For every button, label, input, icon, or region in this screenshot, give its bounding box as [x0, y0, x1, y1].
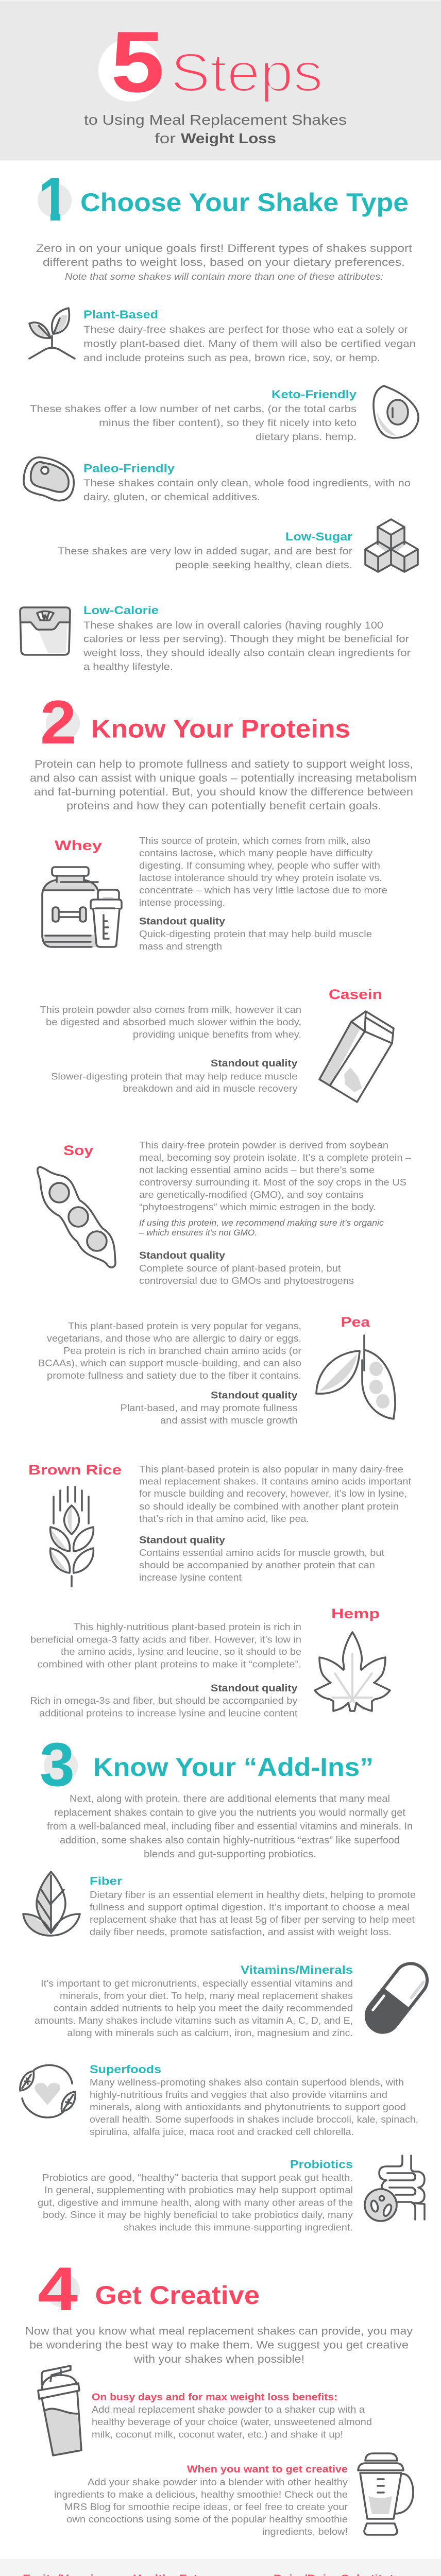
step 3 intro: [47, 1793, 413, 1860]
icon: hemp leaf: [315, 1632, 390, 1711]
icon: sprout: [29, 308, 75, 359]
text: brown rice: increase lysine content: [139, 1572, 242, 1583]
text: brown rice: [139, 1464, 411, 1583]
text: pea: Plant-based, and may promote fullness: [121, 1403, 298, 1413]
subtitle: [84, 112, 347, 146]
icon: protein tub and shaker: [42, 867, 122, 947]
step 3 intro: addition, some shakes also contain highly-nutritious “extras” like superfood: [60, 1835, 400, 1846]
heading: hemp: Hemp: [331, 1606, 380, 1621]
text: soy: Complete source of plant-based protein, but: [139, 1263, 341, 1274]
text: superfoods: [90, 2063, 418, 2137]
step 3 intro: replacement shakes contain to give you the nutrients you would normally get: [54, 1807, 406, 1819]
text: whey: Quick-digesting protein that may help build muscle: [139, 929, 372, 939]
icon: steak: [24, 457, 74, 501]
text: keto-friendly: dietary plans. hemp.: [256, 431, 357, 443]
step 3 heading: 3: [40, 1731, 75, 1799]
icon: soy pod: [38, 1167, 115, 1267]
text: plant-based: mostly plant-based diet. Many of them will also be certified vegan: [83, 338, 416, 349]
step 4 heading: 4: [38, 2255, 78, 2324]
text: get creative: When you want to get creative: [187, 2464, 348, 2475]
text: paleo-friendly: Paleo-Friendly: [83, 462, 175, 475]
text: fiber: Dietary fiber is an essential element in healthy diets, helping to promote: [90, 1890, 416, 1900]
panel: plant-based: [29, 308, 416, 364]
text: pea: and assist with muscle growth: [160, 1415, 298, 1426]
text: plant-based: Plant-Based: [83, 308, 158, 321]
text: probiotics: gut, digestive and immune health, along with many other areas of the: [38, 2198, 353, 2208]
text: casein: Standout quality: [211, 1058, 298, 1069]
text: casein: Slower-digesting protein that may help reduce muscle: [51, 1072, 298, 1082]
text: brown rice: Contains essential amino acids for muscle growth, but: [139, 1548, 384, 1558]
step 2 heading: [40, 688, 350, 757]
text: superfoods: spirulina, alfalfa juice, maca root and cracked cell chlorella.: [90, 2127, 354, 2137]
icon: shaker cup: [38, 2366, 81, 2455]
step 1 intro: different paths to weight loss, based on your dietary preferences.: [43, 257, 405, 268]
text: fiber: replacement shake that has at least 5g of fiber per serving to help meet: [90, 1914, 415, 1925]
icon: capsule: [360, 1957, 434, 2039]
text: casein: This protein powder also comes from milk, however it can: [40, 1005, 301, 1015]
text: keto-friendly: [30, 388, 357, 443]
text: low-calorie: a healthy lifestyle.: [83, 662, 173, 673]
icon: pea pod: [316, 1335, 395, 1419]
step 4 intro: be wondering the best way to make them. We suggest you get creative: [29, 2339, 409, 2351]
step 4 intro: [25, 2326, 413, 2365]
panel: keto-friendly: [30, 386, 418, 443]
text: get creative: MRS Blog for smoothie recipe ideas, or feel free to create your: [64, 2502, 348, 2512]
heading: brown rice: Brown Rice: [28, 1462, 122, 1478]
text: plant-based: and include proteins such as pea, brown rice, soy, or hemp.: [83, 352, 380, 364]
text: brown rice: Standout quality: [139, 1535, 225, 1546]
step 4 intro: with your shakes when possible!: [133, 2353, 304, 2365]
panel: vitamins and minerals: [35, 1957, 434, 2039]
text: whey: contains lactose, which many people have difficulty: [139, 848, 372, 858]
text: superfoods: overall health. Some superfoods in shakes include broccoli, kale, spinach,: [90, 2114, 418, 2125]
text: pea: This plant-based protein is very popular for vegans,: [68, 1321, 301, 1331]
step 1 intro: [36, 243, 412, 282]
text: brown rice: so should ideally be combined with another plant protein: [139, 1501, 399, 1512]
icon: intestine with bacteria: [365, 2156, 425, 2221]
text: casein: providing unique benefits from whey.: [133, 1029, 301, 1040]
text: plant-based: [83, 308, 416, 364]
text: soy: are genetically-modified (GMO), and soy contains: [139, 1190, 364, 1200]
text: whey: This source of protein, which comes from milk, also: [139, 836, 370, 846]
icon: avocado: [374, 386, 418, 438]
panel: superfoods: [20, 2063, 418, 2137]
text: vitamins and minerals: It’s important to get micronutrients, especially essential vitamins and: [41, 1978, 353, 1989]
text: soy: controversial due to GMOs and phytoestrogens: [139, 1276, 354, 1286]
panel: soy: [38, 1140, 411, 1286]
step 3 intro: Next, along with protein, there are additional elements that many meal: [70, 1793, 390, 1804]
text: superfoods: minerals, along with antioxidants and phytonutrients to support good: [90, 2102, 406, 2112]
step 3 heading: Know Your “Add-Ins”: [93, 1753, 374, 1782]
text: low-calorie: [83, 604, 411, 673]
text: fiber: [90, 1874, 416, 1937]
panel: probiotics: [38, 2156, 425, 2233]
text: soy: “phytoestrogens” which mimic estrogen in the body.: [139, 1202, 376, 1212]
text: soy: – which ensures it’s not GMO.: [139, 1228, 257, 1238]
text: soy: Standout quality: [139, 1250, 225, 1261]
step 1 intro: Note that some shakes will contain more than one of these attributes:: [65, 272, 383, 282]
step 2 heading: Know Your Proteins: [91, 714, 350, 743]
icon: superfood heart and leaves: [20, 2065, 75, 2117]
panel: casein: [40, 987, 394, 1102]
text: vitamins and minerals: along with minerals such as calcium, iron, magnesium and zinc.: [67, 2028, 353, 2038]
text: brown rice: that’s rich in that amino acid, like pea.: [139, 1514, 309, 1524]
text: vitamins and minerals: contain added nutrients to help you meet the daily recommended: [54, 2003, 353, 2013]
text: pea: BCAAs), which can support muscle-building, and can also: [38, 1358, 301, 1368]
step 3 intro: from a well-balanced meal, including fiber and essential vitamins and minerals. In: [47, 1821, 413, 1832]
text: whey: [139, 836, 387, 952]
text: pea: Standout quality: [211, 1390, 298, 1401]
step 2 intro: and also can assist with unique goals – potentially increasing metabolism: [30, 772, 417, 784]
text: probiotics: Probiotics are good, “healthy” bacteria that support peak gut health.: [42, 2173, 353, 2183]
text: keto-friendly: Keto-Friendly: [272, 388, 357, 401]
text: brown rice: should be accompanied by another protein that can: [139, 1560, 375, 1570]
step 1 heading: 1: [38, 165, 69, 234]
text: vitamins and minerals: Vitamins/Minerals: [241, 1963, 353, 1976]
text: busy days: milk, coconut milk, coconut water, etc.) and shake it up!: [92, 2430, 343, 2440]
text: soy: If using this protein, we recommend making sure it’s organic: [139, 1218, 384, 1228]
step 1 heading: Choose Your Shake Type: [80, 188, 409, 217]
subtitle: for: [155, 130, 176, 146]
step 1 intro: Zero in on your unique goals first! Different types of shakes support: [36, 243, 412, 255]
text: low-calorie: weight loss, they should ideally also contain clean ingredients for: [83, 648, 411, 659]
text: soy: This dairy-free protein powder is derived from soybean: [139, 1140, 388, 1150]
text: casein: be digested and absorbed much slower within the body,: [46, 1017, 301, 1027]
title word Steps: Steps: [171, 42, 323, 103]
text: whey: digesting. If consuming whey, people who suffer with: [139, 860, 380, 871]
text: paleo-friendly: These shakes contain only clean, whole food ingredients, with no: [83, 478, 411, 489]
text: keto-friendly: minus the fiber content), so they fit nicely into keto: [99, 417, 357, 429]
panel: paleo-friendly: [24, 457, 411, 503]
text: pea: [38, 1321, 301, 1426]
text: whey: intense processing.: [139, 897, 225, 908]
text: fiber: Fiber: [90, 1874, 123, 1888]
text: low-calorie: calories or less per serving). Though they might be beneficial for: [83, 634, 410, 645]
text: casein: breakdown and aid in muscle recovery: [123, 1083, 298, 1094]
text: keto-friendly: These shakes offer a low number of net carbs, (or the total carbs: [30, 403, 357, 415]
panel: pea: [38, 1314, 395, 1426]
panel: low-calorie: [20, 604, 411, 673]
text: low-sugar: These shakes are very low in added sugar, and are best for: [58, 546, 353, 557]
panel: smoothie ingredients: [0, 2559, 441, 2576]
text: hemp: This highly-nutritious plant-based protein is rich in: [74, 1622, 301, 1632]
text: paleo-friendly: [83, 462, 411, 503]
text: vitamins and minerals: amounts. Many shakes include vitamins such as vitamin A, C, D, and E,: [35, 2015, 353, 2026]
step 4 heading: Get Creative: [95, 2281, 260, 2310]
panel: fiber: [23, 1872, 416, 1937]
heading: whey: Whey: [55, 838, 102, 853]
text: soy: [139, 1140, 411, 1286]
text: soy: controversy surrounding it. Most of the soy crops in the US: [139, 1177, 406, 1188]
text: vitamins and minerals: minerals, from your diet. To help, many meal replacement shakes: [60, 1991, 353, 2001]
text: busy days: [92, 2392, 372, 2440]
text: brown rice: meal replacement shakes. It contains amino acids important: [139, 1477, 411, 1487]
text: get creative: ingredients to make a delicious, healthy smoothie! Check out the: [54, 2489, 348, 2500]
icon: blender: [358, 2453, 413, 2535]
text: paleo-friendly: dairy, gluten, or chemical additives.: [83, 492, 260, 503]
panel: hemp: [30, 1606, 390, 1719]
text: pea: promote fullness and satiety due to the fiber it contains.: [47, 1370, 301, 1381]
text: whey: Standout quality: [139, 916, 225, 927]
panel: get creative: [54, 2453, 413, 2537]
text: whey: concentrate – which has very little lactose due to more: [139, 885, 387, 895]
panel: whey: [42, 836, 387, 952]
step 2 intro: and fat-burning potential. But, you should know the difference between: [34, 786, 413, 798]
panel: low-sugar: [58, 519, 418, 572]
panel: busy days: [38, 2366, 372, 2455]
text: vitamins and minerals: [35, 1963, 353, 2038]
text: pea: vegetarians, and those who are allergic to dairy or eggs.: [47, 1333, 301, 1344]
text: brown rice: This plant-based protein is also popular in many dairy-free: [139, 1464, 403, 1475]
text: fiber: daily fiber needs, promote satisfaction, and assist with weight loss.: [90, 1927, 392, 1937]
text: superfoods: Many wellness-promoting shakes also contain superfood blends, with: [90, 2077, 404, 2088]
text: fiber: fullness and support optimal digestion. It’s important to choose a meal: [90, 1902, 410, 1912]
text: hemp: the amino acids, lysine and leucine, so it should to be: [61, 1647, 301, 1657]
text: soy: not lacking essential amino acids – but there’s some: [139, 1165, 375, 1175]
text: plant-based: These dairy-free shakes are perfect for those who eat a solely or: [83, 324, 409, 335]
text: get creative: ingredients, below!: [262, 2527, 348, 2537]
text: casein: [40, 1005, 301, 1094]
text: superfoods: highly-nutritious fruits and veggies that also provide vitamins and: [90, 2090, 387, 2100]
step 3 intro: blends and gut-supporting probiotics.: [144, 1849, 316, 1860]
heading: casein: Casein: [329, 987, 382, 1002]
text: low-calorie: These shakes are low in overall calories (having roughly 100: [83, 620, 383, 631]
step 2 intro: proteins and how they can potentially benefit certain goals.: [66, 800, 381, 812]
text: low-calorie: Low-Calorie: [83, 604, 159, 617]
text: low-sugar: [58, 530, 353, 571]
step 4 heading: [38, 2255, 260, 2324]
heading: pea: Pea: [341, 1314, 370, 1330]
step 4 intro: Now that you know what meal replacement shakes can provide, you may: [25, 2326, 413, 2337]
text: probiotics: body. Since it may be highly beneficial to take probiotics daily, many: [43, 2210, 353, 2220]
text: pea: Pea protein is rich in branched chain amino acids (or: [63, 1346, 301, 1356]
text: busy days: healthy beverage of your choice (water, unsweetened almond: [92, 2417, 372, 2427]
text: get creative: Add your shake powder into a blender with other healthy: [88, 2477, 348, 2487]
text: hemp: Rich in omega-3s and fiber, but should be accompanied by: [30, 1696, 297, 1706]
subtitle: Weight Loss: [181, 130, 276, 146]
text: probiotics: Probiotics: [290, 2158, 353, 2171]
heading: soy: Soy: [63, 1143, 93, 1158]
text: whey: lactose intolerance should try whey protein isolate vs.: [139, 873, 382, 883]
header panel: [0, 1, 441, 161]
step 1 heading: [38, 178, 408, 221]
step 3 heading: [40, 1730, 374, 1799]
icon: milk carton: [319, 1011, 394, 1102]
step 2 intro: Protein can help to promote fullness and satiety to support weight loss,: [35, 758, 413, 770]
step 2 intro: [30, 758, 417, 812]
step 2 heading: 2: [40, 688, 76, 757]
text: hemp: combined with other plant proteins to make it “complete”.: [38, 1659, 301, 1669]
text: hemp: additional proteins to increase lysine and leucine content: [39, 1708, 298, 1719]
text: busy days: Add meal replacement shake powder to a shaker cup with a: [92, 2404, 365, 2415]
panel: brown rice: [28, 1462, 411, 1586]
text: hemp: [30, 1622, 301, 1719]
text: get creative: [54, 2464, 348, 2537]
text: low-sugar: Low-Sugar: [285, 530, 352, 543]
text: hemp: beneficial omega-3 fatty acids and fiber. However, it’s low in: [30, 1634, 301, 1645]
text: hemp: Standout quality: [211, 1683, 298, 1694]
icon: sugar cubes: [365, 519, 418, 572]
text: low-sugar: people seeking healthy, clean diets.: [175, 560, 352, 571]
icon: bathroom scale: [20, 607, 70, 655]
text: whey: mass and strength: [139, 941, 222, 952]
text: probiotics: In general, supplementing with probiotics may help support optimal: [44, 2185, 353, 2195]
text: probiotics: [38, 2158, 353, 2233]
subtitle: to Using Meal Replacement Shakes: [84, 112, 347, 128]
text: get creative: own concoctions using some of the popular healthy smoothie: [66, 2514, 348, 2524]
title number 5: 5: [111, 13, 164, 110]
text: brown rice: for muscle building and recovery, however, it’s low in lysine,: [139, 1488, 407, 1499]
icon: leaves: [23, 1872, 80, 1936]
text: superfoods: Superfoods: [90, 2063, 161, 2076]
icon: wheat: [50, 1487, 93, 1586]
text: probiotics: shakes include this immune-supporting ingredient.: [124, 2223, 353, 2233]
text: busy days: On busy days and for max weight loss benefits:: [92, 2392, 337, 2403]
text: soy: meal, becoming soy protein isolate. It’s a complete protein –: [139, 1153, 411, 1163]
